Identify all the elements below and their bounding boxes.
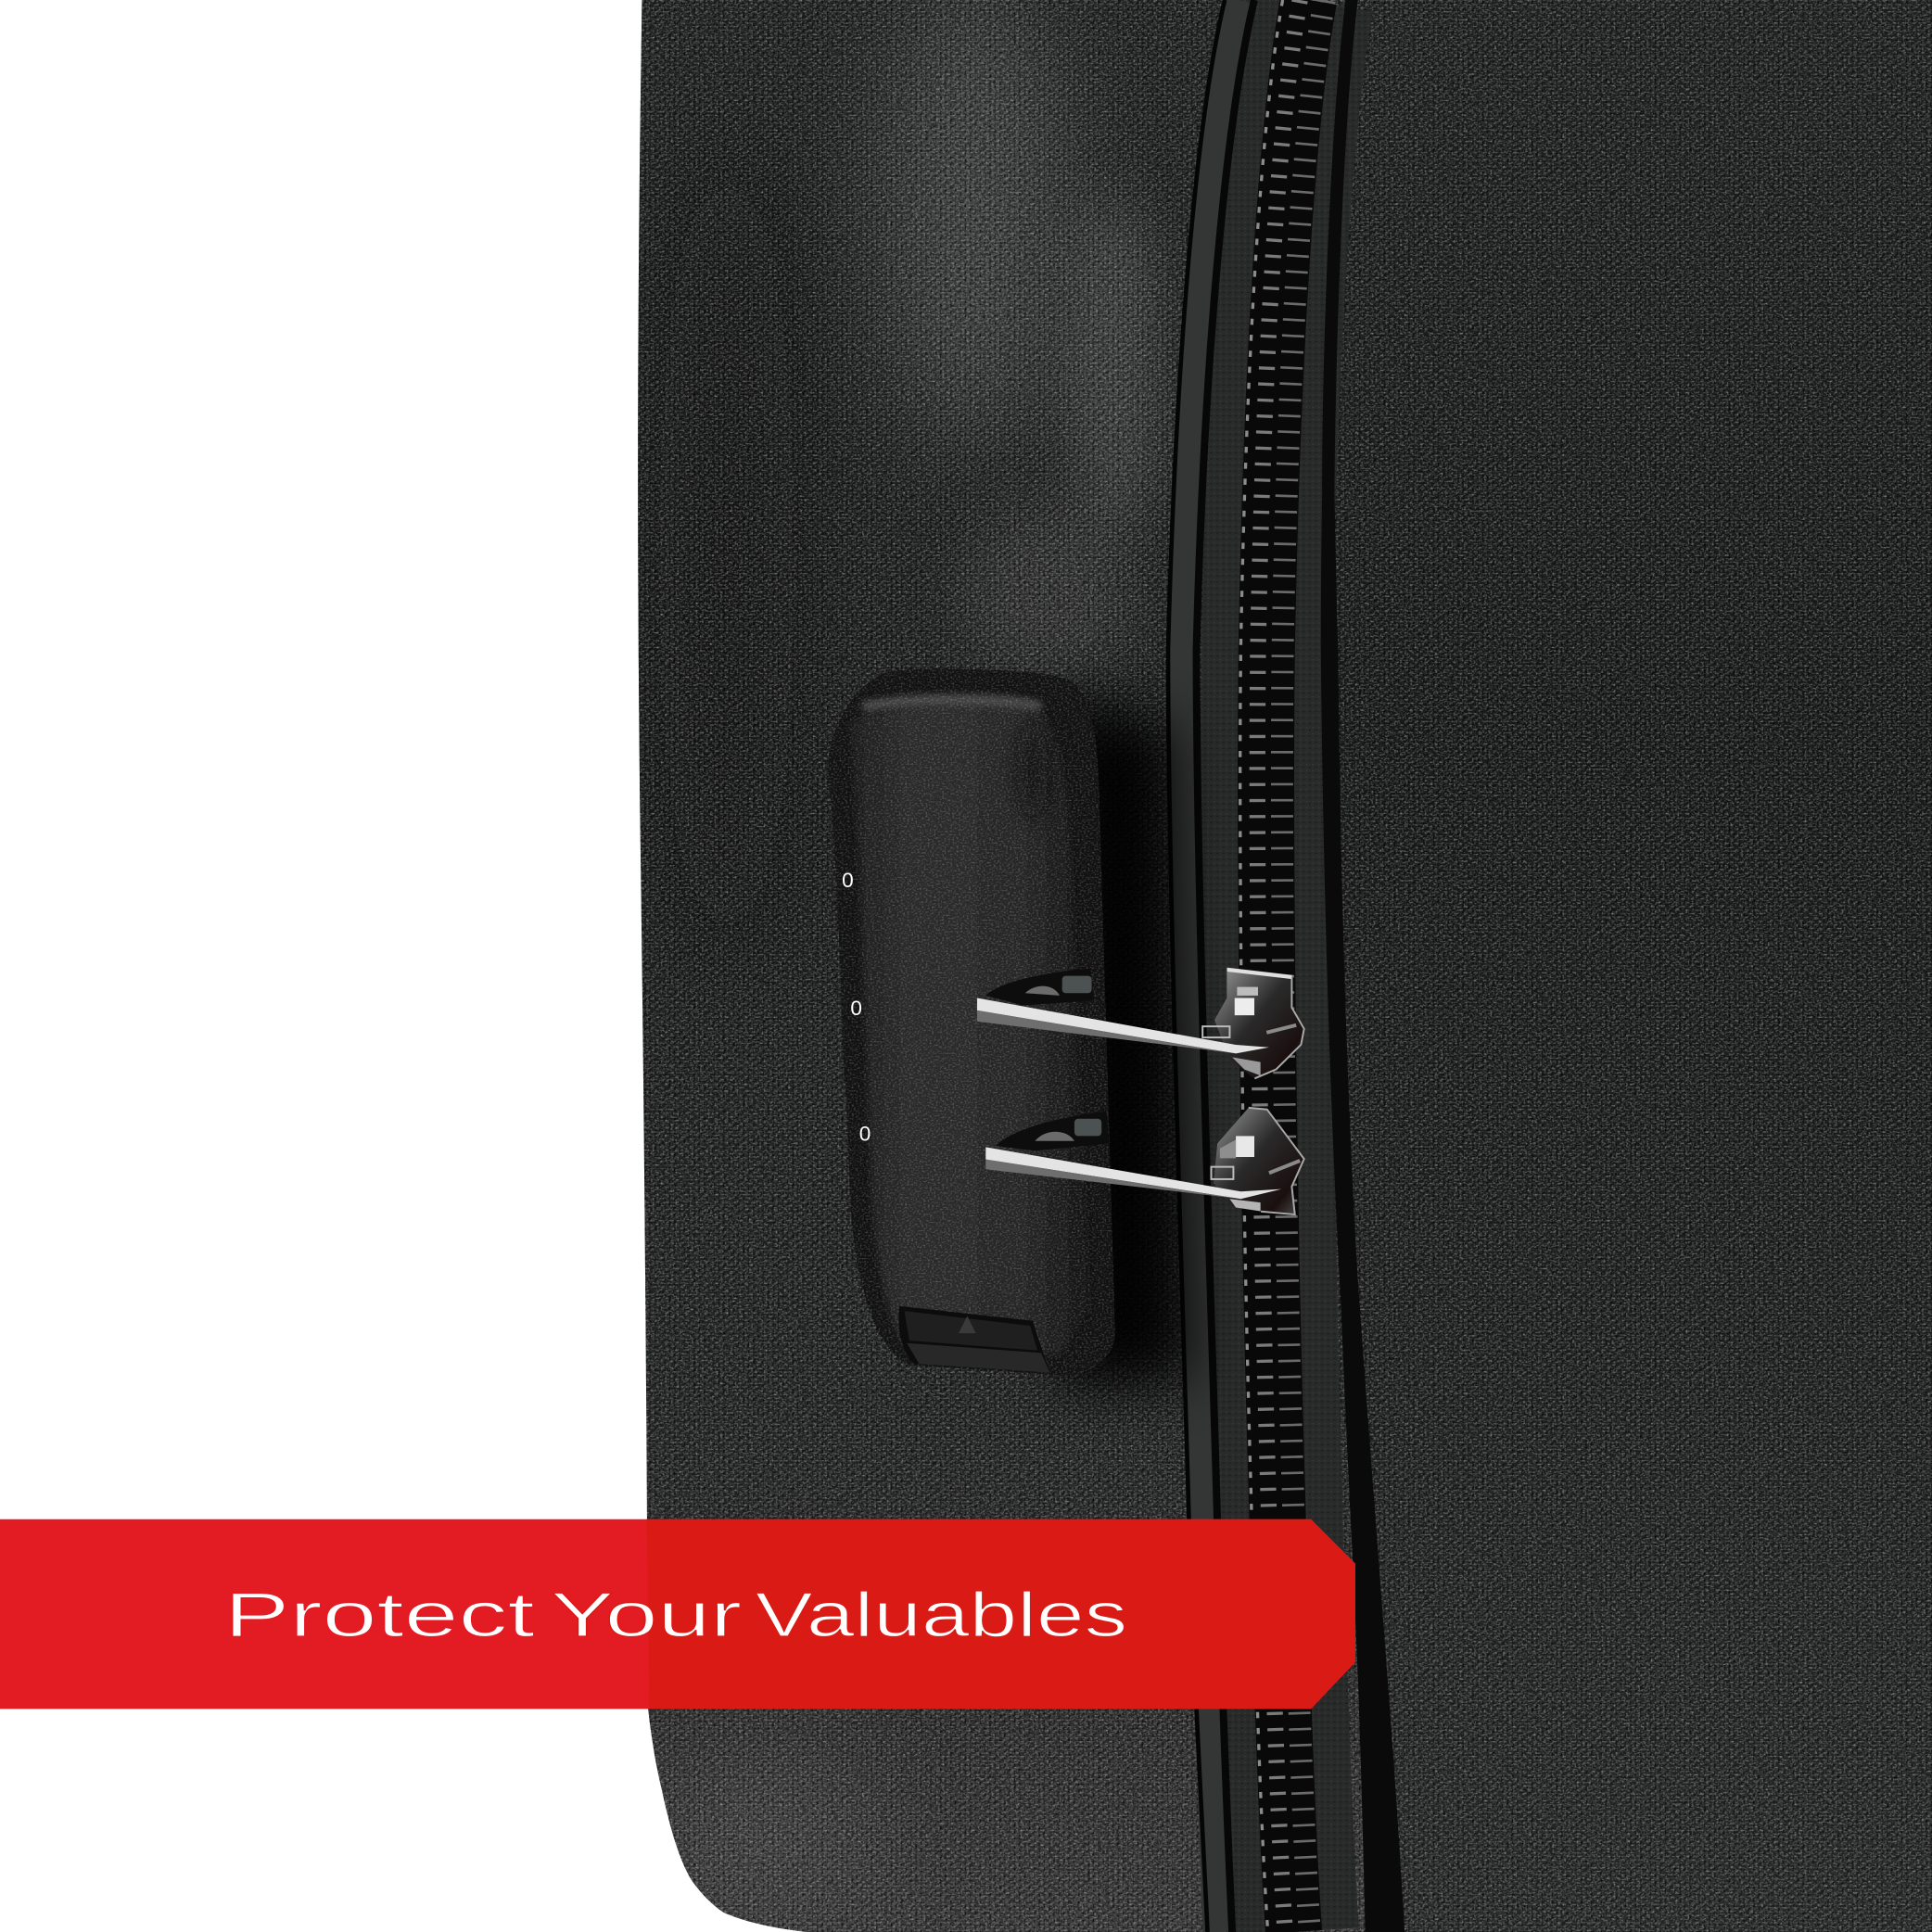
banner headline	[224, 1581, 1127, 1650]
pull rear hinge	[985, 969, 1094, 1006]
digit wheel: 0: 0	[842, 869, 854, 892]
lower zipper pull	[985, 1108, 1304, 1214]
banner shape	[0, 1519, 1355, 1709]
seam dark line	[1168, 0, 1225, 1932]
banner headline: Your	[551, 1581, 742, 1650]
bag body with woven texture	[638, 0, 1932, 1932]
banner headline: Protect	[224, 1581, 535, 1650]
tape dark line	[1197, 0, 1254, 1932]
zipper coil	[1266, 0, 1308, 1932]
pull tab	[977, 998, 1269, 1053]
banner part over bag	[647, 1519, 1355, 1709]
lock shadow	[1060, 696, 1189, 1386]
upper zipper pull	[977, 969, 1304, 1078]
zipper tape	[1266, 0, 1308, 1932]
lock face	[828, 669, 1115, 1376]
seam band	[1183, 0, 1239, 1932]
combination lock	[813, 666, 1189, 1392]
red banner	[0, 1519, 1355, 1709]
pull tab	[985, 1147, 1281, 1199]
slider head	[1214, 969, 1304, 1078]
slider head	[1214, 1108, 1304, 1214]
lock body	[828, 669, 1115, 1376]
digit wheel: 0: 0	[850, 997, 862, 1020]
reset button recess	[898, 1306, 1049, 1373]
banner headline: Valuables	[756, 1581, 1127, 1650]
pull rear hinge	[996, 1112, 1109, 1150]
digit wheel: 0: 0	[859, 1123, 871, 1146]
zipper and seam	[1168, 0, 1325, 1932]
right black piping	[1321, 0, 1405, 1932]
